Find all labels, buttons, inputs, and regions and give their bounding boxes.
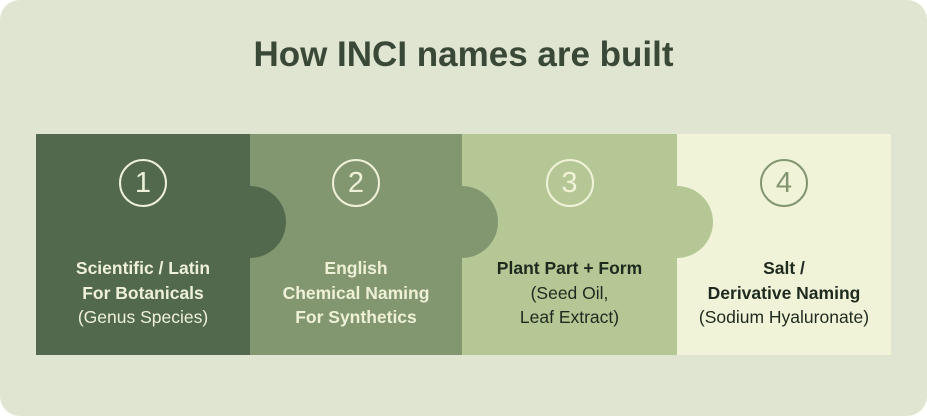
text 4: Derivative Naming bbox=[708, 282, 860, 302]
panel: step 3 bbox=[462, 134, 677, 355]
title: How INCI names are built bbox=[253, 35, 674, 74]
text 2 bbox=[283, 258, 429, 327]
number 2: 2 bbox=[348, 167, 364, 199]
text 4: (Sodium Hyaluronate) bbox=[699, 307, 869, 327]
number 1 bbox=[119, 159, 167, 207]
text 2: English bbox=[324, 258, 388, 278]
number 3 bbox=[546, 159, 594, 207]
panel: step 4 bbox=[677, 134, 891, 355]
text 4 bbox=[699, 258, 869, 327]
text 1 bbox=[76, 258, 210, 327]
text 2: Chemical Naming bbox=[283, 282, 429, 302]
tab 2 bbox=[426, 186, 498, 258]
number 4: 4 bbox=[776, 167, 792, 199]
text 1: (Genus Species) bbox=[78, 307, 208, 327]
tab 1 bbox=[214, 186, 286, 258]
text 4: Salt / bbox=[763, 258, 805, 278]
panel: step 2 bbox=[250, 134, 462, 355]
text 1: For Botanicals bbox=[82, 282, 204, 302]
text 2: For Synthetics bbox=[295, 307, 417, 327]
text 1: Scientific / Latin bbox=[76, 258, 210, 278]
text 3 bbox=[497, 258, 642, 327]
number 3: 3 bbox=[561, 167, 578, 199]
tab 3 bbox=[641, 186, 713, 258]
number 4 bbox=[760, 159, 808, 207]
number 2 bbox=[332, 159, 380, 207]
text 3: Plant Part + Form bbox=[497, 258, 642, 278]
text 3: Leaf Extract) bbox=[520, 307, 619, 327]
number 1: 1 bbox=[135, 167, 151, 199]
text 3: (Seed Oil, bbox=[531, 282, 608, 302]
panel: step 1 bbox=[36, 134, 250, 355]
